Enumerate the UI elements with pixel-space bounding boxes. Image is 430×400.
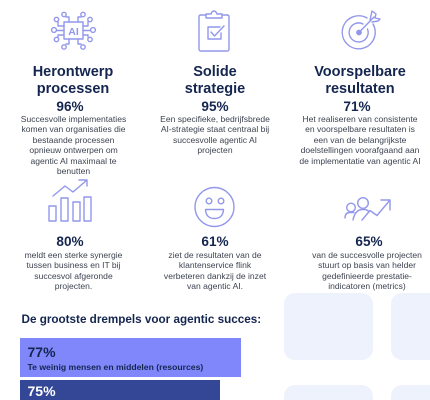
bar: 77% resources: [20, 338, 241, 377]
text: resultaten description: de implementatie van agentic AI: [299, 156, 421, 166]
label: resources: Te weinig mensen en middelen (resources): [28, 362, 203, 372]
text: metrics description: gedefinieerde prestatie-: [322, 271, 412, 281]
text: herontwerp description: komen van organisaties die: [21, 124, 126, 134]
heading: Voorspelbare resultaten: [314, 64, 406, 97]
heading: Voorspelbare resultaten: Voorspelbare: [314, 64, 406, 80]
heading: Voorspelbare resultaten: resultaten: [325, 81, 395, 97]
text: synergie description: meldt een sterke synergie: [25, 250, 122, 260]
text: metrics description: [312, 250, 422, 291]
value: 75%: 75%: [28, 383, 56, 399]
text: metrics description: van de succesvolle projecten: [312, 250, 422, 260]
text: metrics description: stuurt op basis van helder: [318, 260, 416, 270]
text: klantenservice description: klantenservice flink: [179, 260, 251, 270]
text: synergie description: succesvol afgeronde: [34, 271, 113, 281]
text: strategie description: AI-strategie staat centraal bij: [161, 124, 269, 134]
text: klantenservice description: [164, 250, 266, 291]
heading: barriers: De grootste drempels voor agentic succes:: [22, 313, 261, 326]
icon: target with arrow: [342, 10, 381, 50]
icon: AI chip: AI: [68, 26, 79, 38]
text: klantenservice description: ziet de resultaten van de: [168, 250, 262, 260]
text: strategie description: projecten: [197, 145, 233, 155]
text: resultaten description: en voorspelbare resultaten is: [305, 124, 415, 134]
text: synergie description: tussen business en IT bij: [27, 260, 120, 270]
text: klantenservice description: verbeteren dankzij de inzet: [164, 271, 266, 281]
text: strategie description: succesvolle agentic AI: [173, 135, 257, 145]
text: herontwerp description: opnieuw ontwerpen om: [29, 145, 118, 155]
text: klantenservice description: van agentic AI.: [187, 281, 243, 291]
icon: people with rising arrow: [344, 197, 391, 221]
text: herontwerp description: [21, 114, 126, 176]
stat: 61%: 61%: [201, 234, 229, 249]
stat: 80%: 80%: [56, 234, 84, 249]
heading: Solide strategie: Solide: [193, 64, 237, 80]
icon: clipboard with check: [198, 10, 230, 52]
text: herontwerp description: Succesvolle implementaties: [21, 114, 126, 124]
stat: 96%: 96%: [56, 98, 84, 114]
heading: Solide strategie: strategie: [185, 81, 245, 97]
text: strategie description: Een specifieke, bedrijfsbrede: [160, 114, 270, 124]
stat: 71%: 71%: [343, 98, 371, 114]
text: metrics description: indicatoren (metrics): [328, 281, 406, 291]
text: synergie description: [25, 250, 122, 291]
value: 77%: 77%: [28, 344, 56, 360]
stat: 95%: 95%: [201, 98, 229, 114]
background tiles: [284, 293, 430, 400]
text: resultaten description: Het realiseren van consistente: [302, 114, 417, 124]
text: herontwerp description: benutten: [57, 166, 90, 176]
text: herontwerp description: agentic AI maximaal te: [30, 156, 116, 166]
icon: bar chart with rising arrow: [48, 179, 92, 222]
stat: 65%: 65%: [355, 234, 383, 249]
text: resultaten description: doelstellingen voorafgaand aan: [301, 145, 419, 155]
bar: 75%: [20, 380, 220, 400]
text: synergie description: projecten.: [55, 281, 92, 291]
icon: smiling face: [194, 186, 235, 228]
heading: Herontwerp processen: processen: [37, 81, 109, 97]
icon: AI chip: [50, 12, 96, 50]
text: herontwerp description: bestaande processen: [33, 135, 114, 145]
heading: Solide strategie: [185, 64, 245, 97]
heading: Herontwerp processen: [33, 64, 113, 97]
text: resultaten description: [299, 114, 421, 166]
text: resultaten description: een van de belangrijkste: [314, 135, 406, 145]
heading: Herontwerp processen: Herontwerp: [33, 64, 113, 80]
text: strategie description: [160, 114, 270, 155]
